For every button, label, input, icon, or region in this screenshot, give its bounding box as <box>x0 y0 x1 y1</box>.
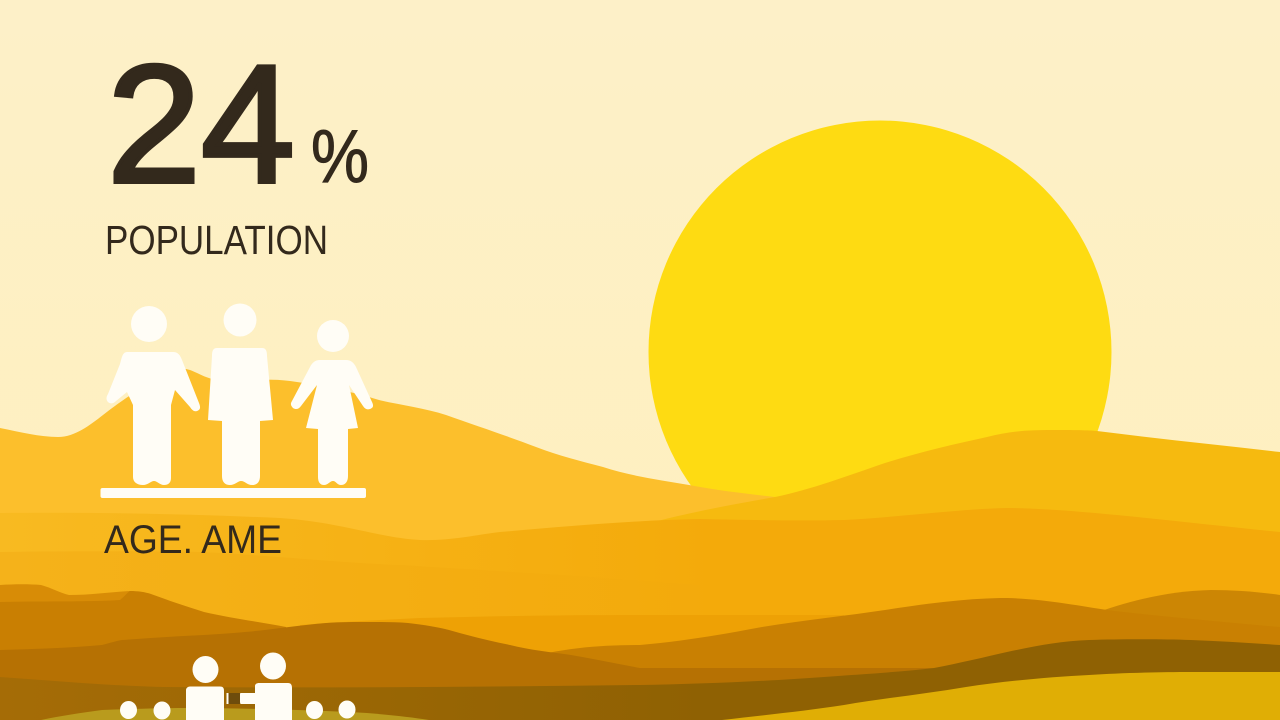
middle band <box>0 508 1280 660</box>
landscape: layered hills <box>0 369 1280 720</box>
small dot 1 <box>120 701 137 719</box>
handshake gap <box>228 693 240 704</box>
label: population: POPULATION <box>105 217 328 263</box>
number 24: 24 <box>107 30 295 218</box>
sun <box>648 120 1112 584</box>
left ridge <box>0 591 300 660</box>
back hill right <box>640 430 1280 640</box>
small dot 2 <box>154 702 170 720</box>
person left <box>186 656 224 720</box>
foreground left field <box>41 708 429 720</box>
icon: three people on a platform <box>100 304 373 498</box>
right ridge <box>520 598 1280 700</box>
person right <box>240 652 292 720</box>
central dark hill <box>0 622 934 720</box>
headline stat: 24% <box>107 30 369 218</box>
right ridge far peak <box>1090 590 1280 640</box>
label: age name: AGE. AME <box>104 518 282 562</box>
orange band <box>300 615 844 680</box>
person: woman <box>291 320 373 485</box>
lower band left <box>0 551 700 660</box>
percent sign: % <box>311 114 369 198</box>
hand mark <box>226 693 228 704</box>
icon: people shaking hands with small circles <box>120 652 356 720</box>
dark river band <box>0 639 1280 720</box>
small dot 4 <box>338 700 356 718</box>
small dot 3 <box>306 701 323 719</box>
foreground right field <box>722 672 1280 720</box>
far left ridge <box>0 584 160 640</box>
person: man <box>106 306 200 485</box>
platform bar <box>100 488 366 498</box>
person: middle figure <box>208 304 273 485</box>
back hill left <box>0 369 800 620</box>
